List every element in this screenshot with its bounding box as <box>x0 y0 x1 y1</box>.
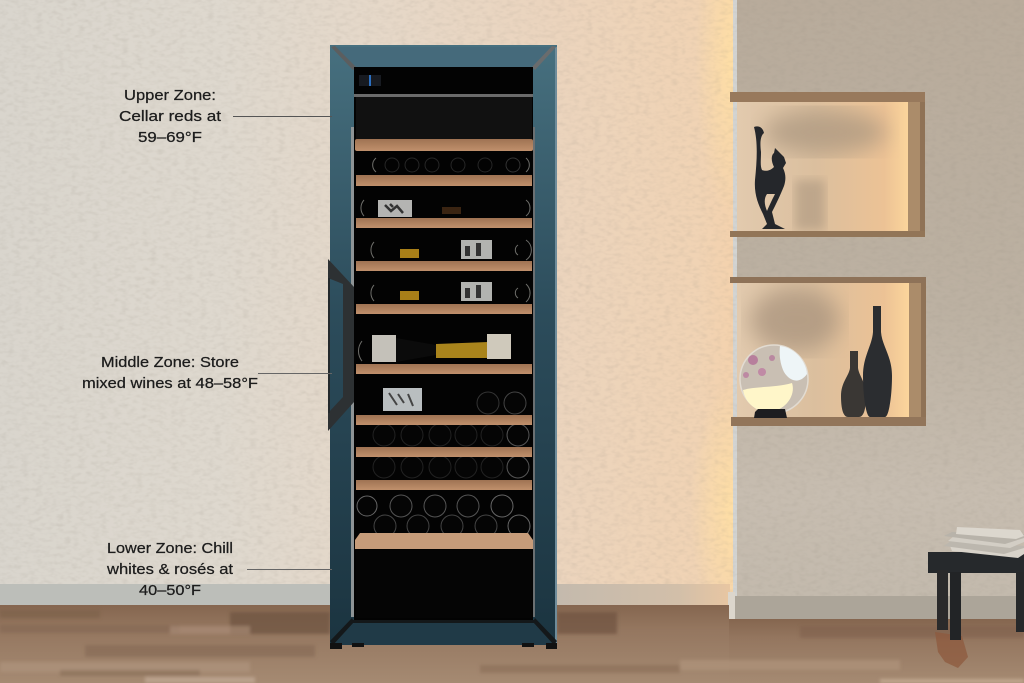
icon: small vase <box>841 351 866 417</box>
wooden shelves <box>355 139 533 549</box>
horizontal bottle with gold foil <box>372 334 511 362</box>
label: middle zone <box>82 354 332 392</box>
cabinet interior <box>354 67 533 620</box>
side table with books <box>928 527 1024 640</box>
lower niche <box>730 277 926 426</box>
wooden floor <box>0 605 1024 683</box>
door handle <box>328 259 354 431</box>
label: upper zone <box>119 87 332 146</box>
icon: decorative plate <box>740 345 808 418</box>
label: middle zone: mixed wines at 48–58°F <box>82 375 258 392</box>
wine cabinet <box>328 45 557 649</box>
label: middle zone: Middle Zone: Store <box>101 354 239 371</box>
cabinet frame <box>330 45 557 645</box>
upper empty compartment <box>356 97 532 139</box>
label: lower zone: 40–50°F <box>139 582 201 599</box>
cabinet feet <box>330 643 557 649</box>
label: upper zone: Upper Zone: <box>124 87 216 104</box>
icon: cat statue <box>754 126 786 229</box>
icon: tall vase <box>863 306 892 417</box>
label: upper zone: Cellar reds at <box>119 108 222 125</box>
label: lower zone: Lower Zone: Chill <box>107 540 233 557</box>
label: lower zone <box>106 540 332 599</box>
upper niche <box>730 92 925 237</box>
wine labels <box>378 200 492 411</box>
lower empty compartment <box>356 550 532 618</box>
label: upper zone: 59–69°F <box>138 129 202 146</box>
control panel <box>354 75 533 97</box>
bottle outlines <box>358 158 531 361</box>
bottle groups on stacked shelves <box>357 392 530 537</box>
label: lower zone: whites & rosés at <box>106 561 234 578</box>
skirting board <box>0 584 1024 619</box>
